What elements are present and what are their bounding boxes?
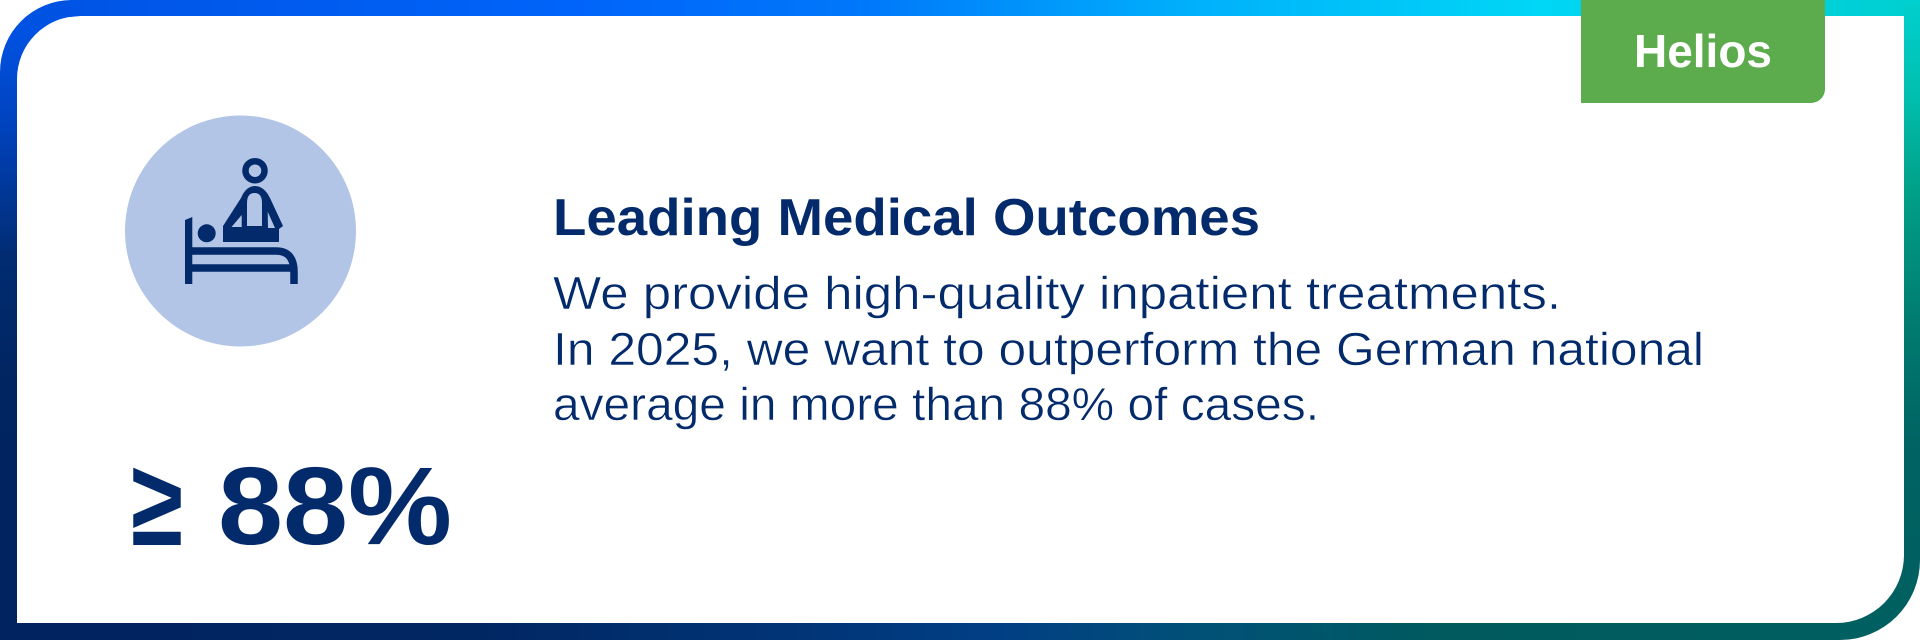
body text: average in more than 88% of cases. [553,378,1319,430]
heading: Leading Medical Outcomes [553,189,1260,247]
body text [553,267,1704,430]
body text: We provide high-quality inpatient treatments. [553,267,1561,319]
body text: In 2025, we want to outperform the German national [553,323,1704,375]
key figure: at least 88%: 88% [218,445,452,568]
icon: doctor at patient bedside [125,116,356,346]
badge: Helios: Helios [1634,25,1772,77]
key figure: at least 88% [131,435,452,571]
badge: Helios [1581,0,1825,103]
key figure: at least 88%: ≥ [131,435,183,571]
